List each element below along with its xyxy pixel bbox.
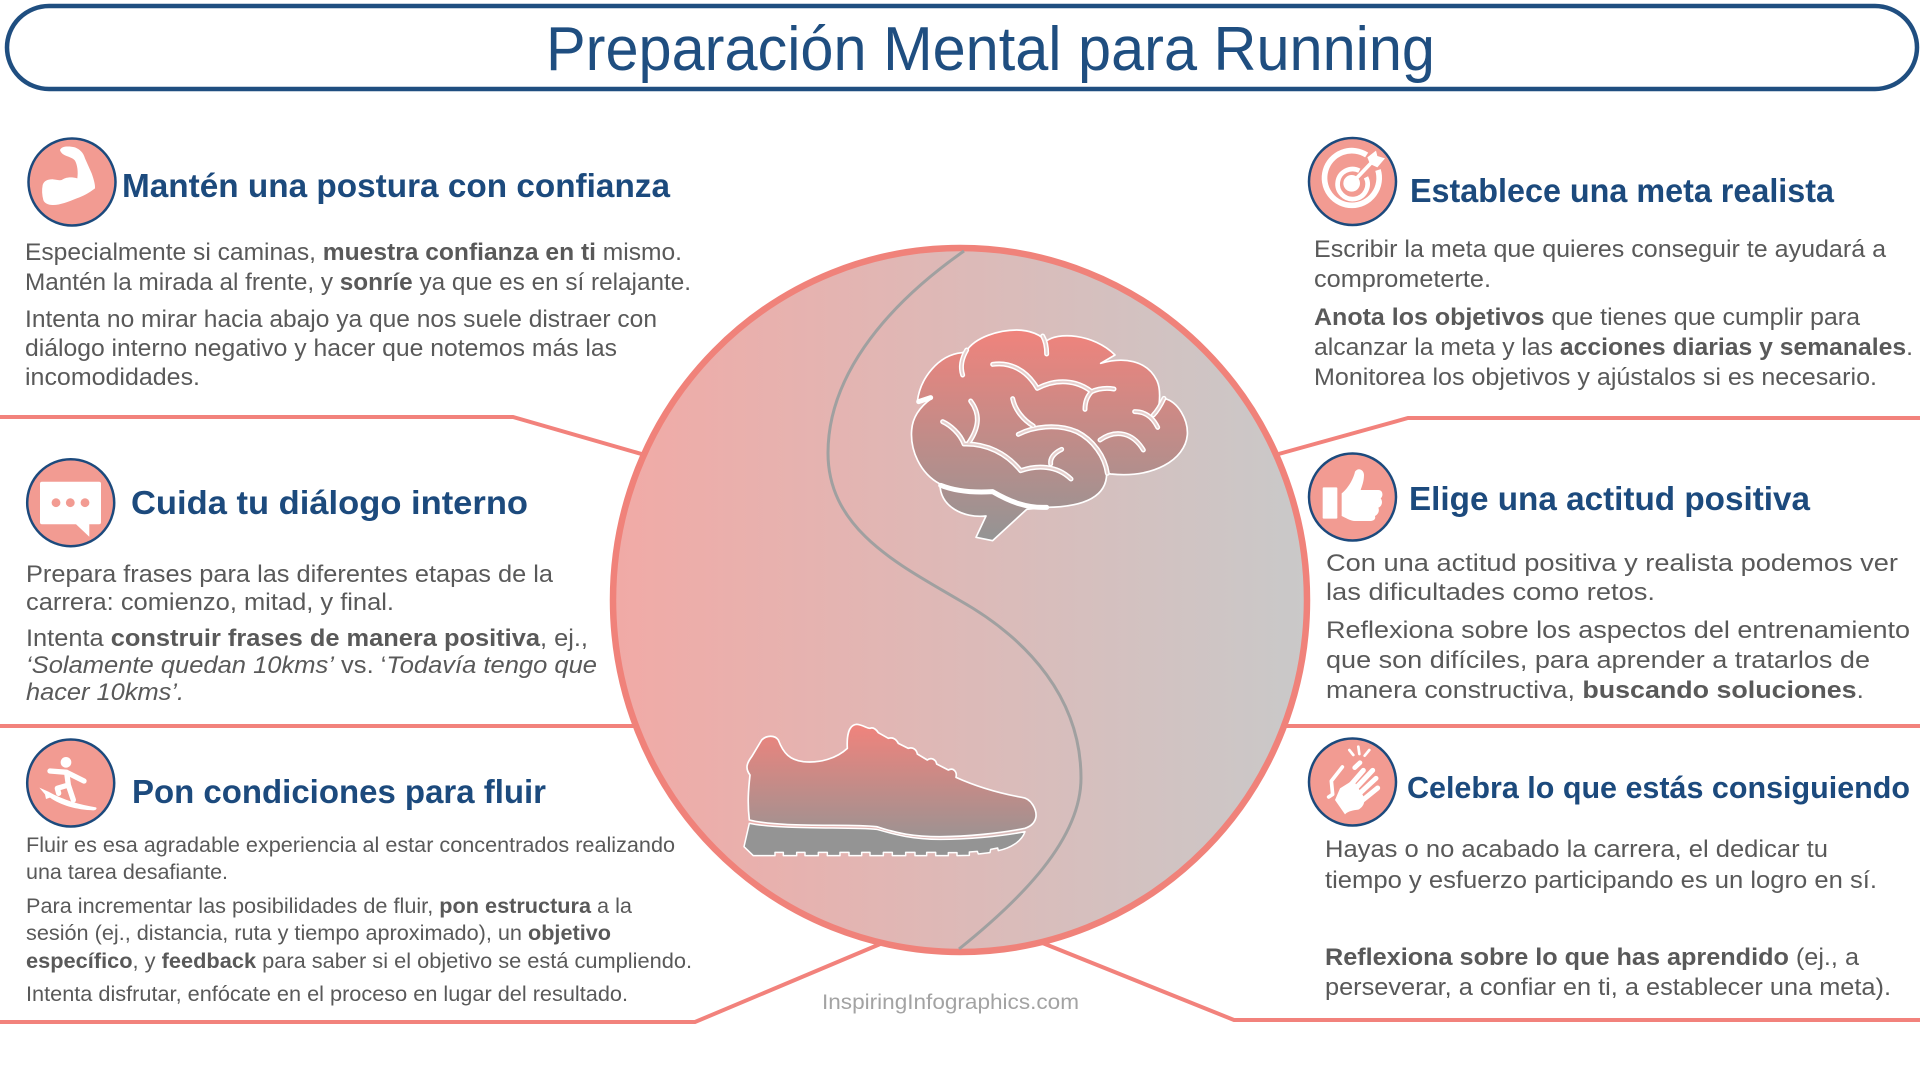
text block: Hayas o no acabado la carrera, el dedicar tu	[1325, 836, 1828, 863]
text block: Escribir la meta que quieres conseguir te ayudará a	[1314, 236, 1887, 263]
panel: actitud positiva	[1309, 454, 1910, 704]
text block: Prepara frases para las diferentes etapas de la	[26, 561, 554, 588]
title banner	[7, 6, 1917, 89]
text block: específico, y feedback para saber si el objetivo se está cumpliendo.	[26, 949, 692, 973]
text block: Intenta disfrutar, enfócate en el proceso en lugar del resultado.	[26, 982, 628, 1006]
text block	[1314, 236, 1913, 391]
text block: incomodidades.	[25, 364, 200, 391]
text block: alcanzar la meta y las acciones diarias y semanales .	[1314, 334, 1913, 361]
text block	[1326, 550, 1910, 704]
panel: dialogo interno	[26, 459, 597, 706]
text block: las dificultades como retos.	[1326, 579, 1655, 606]
panel: condiciones para fluir	[26, 740, 692, 1006]
text block: Anota los objetivos que tienes que cumplir para	[1314, 304, 1861, 331]
text block: Reflexiona sobre lo que has aprendido (ej., a	[1325, 944, 1860, 971]
text block: Especialmente si caminas, muestra confianza en ti mismo.	[25, 239, 682, 266]
text block: Con una actitud positiva y realista podemos ver	[1326, 550, 1898, 577]
text block: Reflexiona sobre los aspectos del entrenamiento	[1326, 617, 1910, 644]
text block: hacer 10kms’.	[26, 679, 184, 706]
text block: Intenta construir frases de manera positiva , ej.,	[26, 625, 588, 652]
heading: Elige una actitud positiva	[1409, 480, 1811, 517]
s-curve divider	[828, 251, 1081, 949]
text block	[26, 561, 597, 706]
icon: running shoe	[744, 724, 1036, 856]
heading: Establece una meta realista	[1410, 172, 1835, 209]
text block: Monitorea los objetivos y ajústalos si es necesario.	[1314, 364, 1877, 391]
heading: Pon condiciones para fluir	[132, 773, 546, 810]
text block: que son difíciles, para aprender a tratarlos de	[1326, 647, 1870, 674]
heading: Cuida tu diálogo interno	[131, 484, 528, 521]
icon: thumbs up	[1309, 454, 1396, 540]
panel: postura con confianza	[25, 138, 691, 391]
text block	[26, 833, 692, 1006]
text block: perseverar, a confiar en ti, a establecer una meta).	[1325, 974, 1891, 1001]
text block: diálogo interno negativo y hacer que notemos más las	[25, 335, 617, 362]
text block: tiempo y esfuerzo participando es un logro en sí.	[1325, 867, 1877, 894]
icon: brain	[911, 330, 1187, 541]
heading: Celebra lo que estás consiguiendo	[1407, 771, 1910, 805]
icon: clapping hands	[1309, 738, 1396, 826]
text block: sesión (ej., distancia, ruta y tiempo aproximado), un objetivo	[26, 921, 611, 945]
central circle	[613, 248, 1307, 952]
icon: target	[1309, 138, 1396, 225]
text block: carrera: comienzo, mitad, y final.	[26, 589, 394, 616]
icon: speech bubble	[27, 459, 114, 546]
icon: flexed arm	[28, 138, 116, 226]
text block: Intenta no mirar hacia abajo ya que nos suele distraer con	[25, 306, 657, 333]
text block	[25, 239, 691, 391]
text block	[1325, 836, 1891, 1001]
panel: meta realista	[1309, 138, 1913, 391]
text block: comprometerte.	[1314, 266, 1491, 293]
text block: Para incrementar las posibilidades de fluir, pon estructura a la	[26, 894, 632, 918]
heading: Mantén una postura con confianza	[122, 167, 671, 204]
credit: InspiringInfographics.com	[822, 991, 1079, 1014]
icon: surfer	[27, 740, 114, 826]
text block: una tarea desafiante.	[26, 860, 228, 884]
text block: Fluir es esa agradable experiencia al estar concentrados realizando	[26, 833, 675, 857]
text block: ‘Solamente quedan 10kms’ vs. ‘Todavía tengo que	[26, 652, 597, 679]
title: Preparación Mental para Running	[546, 15, 1435, 84]
connector lines	[0, 417, 1920, 1022]
text block: manera constructiva, buscando soluciones .	[1326, 677, 1864, 704]
panel: celebra	[1309, 738, 1910, 1001]
text block: Mantén la mirada al frente, y sonríe ya que es en sí relajante.	[25, 269, 691, 296]
